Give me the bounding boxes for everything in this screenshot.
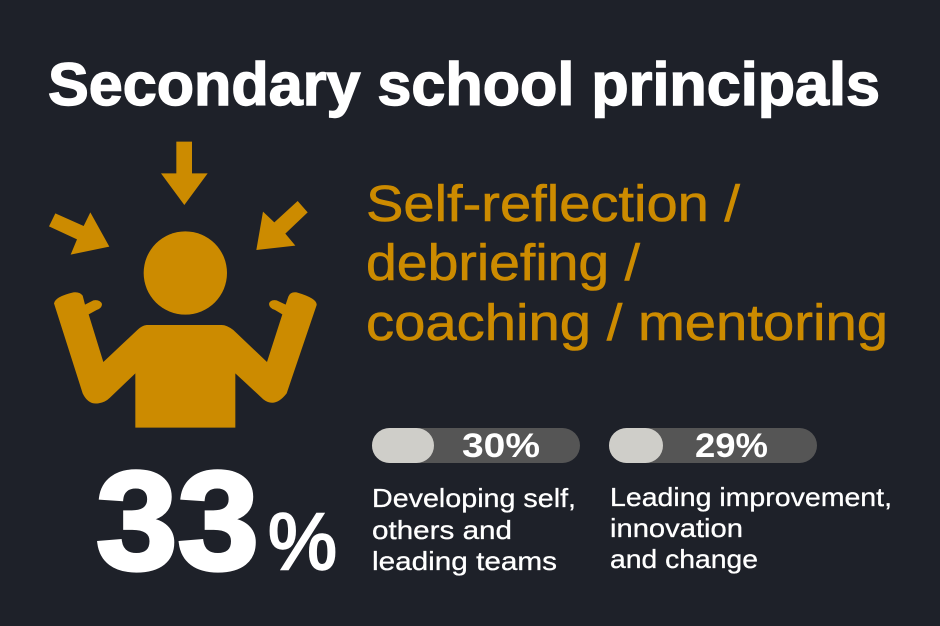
heading: topic: debriefing /: [366, 234, 641, 291]
heading: topic: Self-reflection /: [366, 175, 741, 232]
heading: topic: coaching / mentoring: [366, 294, 888, 351]
icon: person with arrows pointing at head: [49, 142, 317, 428]
body with raised arms: [54, 292, 317, 428]
label: leading improvement: Leading improvement,: [610, 482, 892, 512]
label: leading improvement: and change: [610, 544, 758, 574]
progress bar: 30%: 30%: [462, 427, 540, 465]
progress bar: 30%: [372, 427, 580, 465]
label: leading improvement: [610, 482, 892, 574]
progress bar: 29%: [609, 427, 817, 465]
arrow: right: [256, 201, 308, 250]
head: [144, 231, 227, 315]
arrow: top: [161, 142, 208, 205]
label: developing self: others and: [372, 515, 512, 545]
main statistic: 33%: [96, 442, 337, 599]
main statistic: 33%: 33: [96, 442, 259, 599]
label: leading improvement: innovation: [610, 513, 743, 543]
label: developing self: leading teams: [372, 546, 557, 576]
title: Secondary school principals: [48, 51, 880, 118]
progress bar: 29%: 29%: [695, 427, 768, 465]
label: developing self: [372, 483, 576, 576]
main statistic: 33%: %: [268, 497, 337, 586]
label: developing self: Developing self,: [372, 483, 576, 513]
heading: topic: [366, 175, 888, 351]
arrow: left: [49, 212, 109, 255]
